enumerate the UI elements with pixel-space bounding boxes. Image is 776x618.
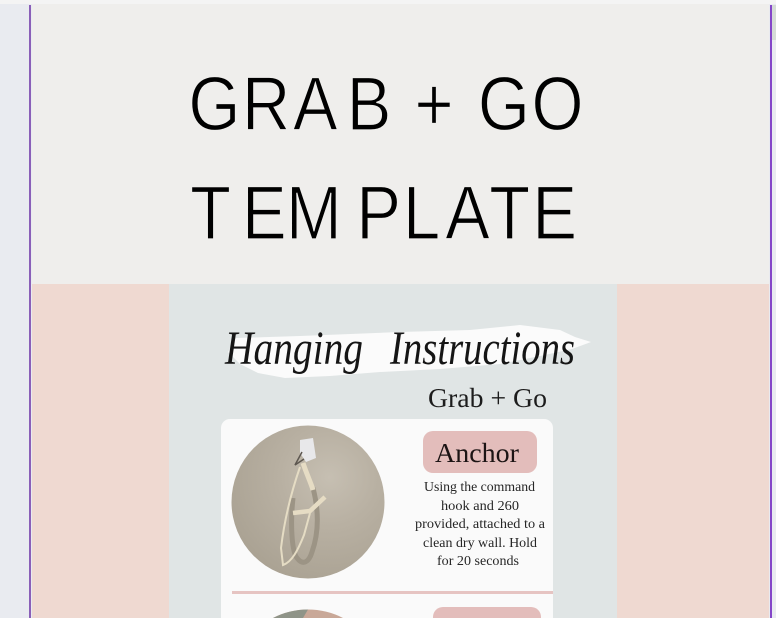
title line one: GRAB + GO bbox=[188, 62, 584, 147]
divider bbox=[232, 591, 553, 594]
right edge sliver bbox=[772, 5, 776, 40]
right purple border bbox=[770, 5, 772, 618]
panel: title background bbox=[32, 4, 769, 284]
photo: hook and ribbon on wall bbox=[232, 426, 384, 578]
panel: instruction sheet bbox=[169, 284, 617, 618]
title line two: TEMPLATE bbox=[190, 171, 577, 256]
anchor instructions: for 20 seconds bbox=[437, 553, 519, 568]
anchor instructions: clean dry wall. Hold bbox=[423, 535, 537, 550]
left purple border bbox=[29, 5, 31, 618]
card bbox=[221, 419, 553, 618]
anchor instructions: hook and 260 bbox=[441, 498, 519, 513]
panel: pink backdrop bbox=[32, 284, 769, 618]
script heading: Instructions bbox=[389, 322, 575, 375]
brush stroke bbox=[228, 325, 591, 378]
second label pill bbox=[433, 607, 541, 618]
anchor instructions bbox=[415, 479, 545, 568]
title bbox=[188, 62, 584, 256]
script heading bbox=[224, 322, 575, 375]
script heading: Hanging bbox=[224, 322, 363, 375]
subheading: Grab + Go bbox=[428, 383, 547, 413]
anchor instructions: Using the command bbox=[424, 479, 535, 494]
label: Anchor: Anchor bbox=[435, 438, 519, 468]
anchor instructions: provided, attached to a bbox=[415, 516, 545, 531]
label: Anchor bbox=[423, 431, 537, 473]
second photo bbox=[273, 610, 343, 618]
